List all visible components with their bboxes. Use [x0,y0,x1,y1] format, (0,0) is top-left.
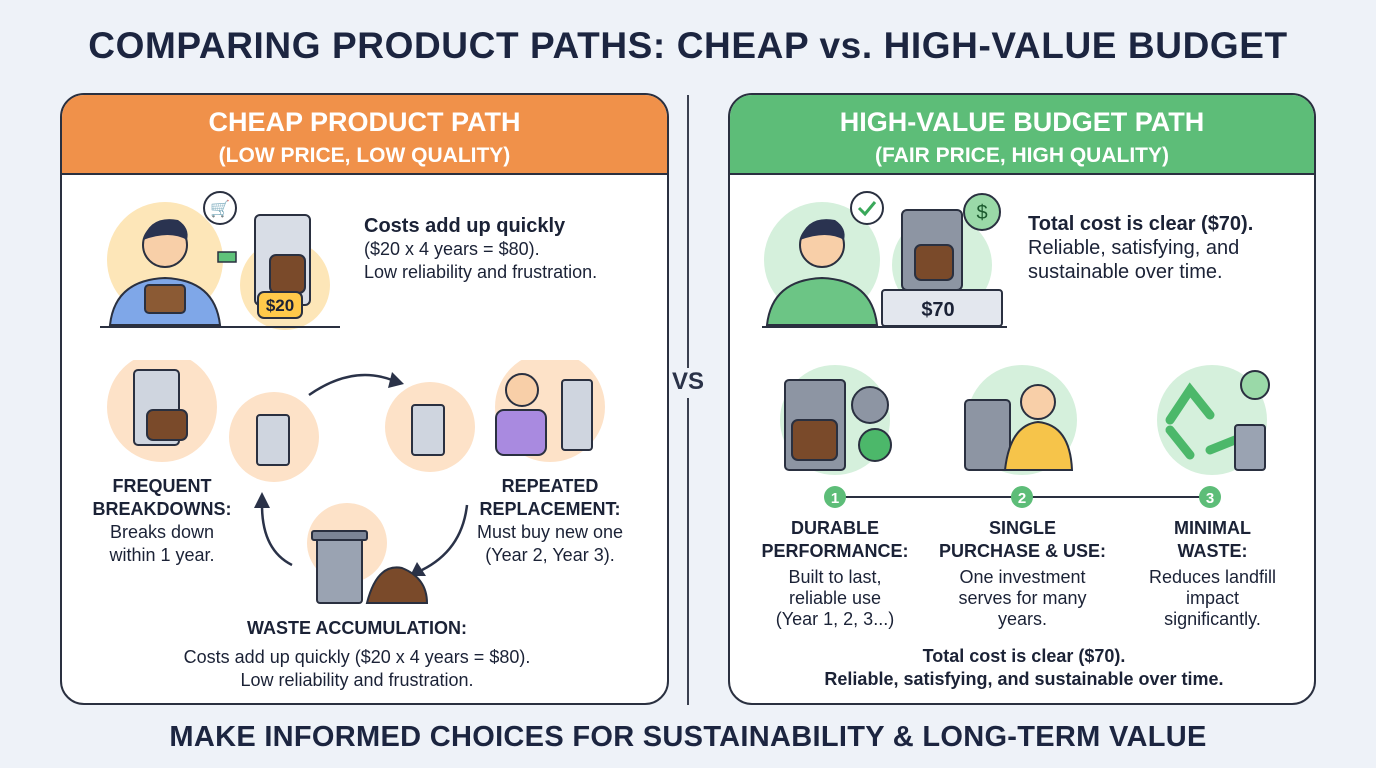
text block: costs add up: ($20 x 4 years = $80). [364,239,540,259]
panel: cheap product path [60,93,669,705]
label: single purchase: PURCHASE & USE: [939,541,1106,561]
label: minimal waste: MINIMAL [1174,518,1251,538]
label: durable performance: (Year 1, 2, 3...) [776,609,894,629]
label: frequent breakdowns: within 1 year. [109,545,215,565]
timeline: 3 [1206,490,1214,507]
header: cheap: CHEAP PRODUCT PATH [208,107,521,137]
label: durable performance: PERFORMANCE: [762,541,908,561]
label: waste accumulation: Low reliability and frustration. [240,670,474,690]
text block: costs add up: Costs add up quickly [364,215,565,237]
label: single purchase: serves for many [958,588,1087,608]
label: repeated replacement: (Year 2, Year 3). [485,545,615,565]
illustration: person with quality maker [762,191,1007,328]
text block: total cost is clear [1028,213,1253,283]
text block: total cost is clear: Total cost is clear ($70). [1028,213,1253,235]
header: high-value: HIGH-VALUE BUDGET PATH [840,107,1204,137]
label: durable performance: DURABLE [791,518,879,538]
label: frequent breakdowns: BREAKDOWNS: [92,499,232,519]
label: minimal waste: Reduces landfill [1149,567,1276,587]
divider line [687,95,689,705]
header: high-value: (FAIR PRICE, HIGH QUALITY) [875,144,1169,167]
text block: summary [824,646,1224,689]
label: waste accumulation: Costs add up quickly ($20 x 4 years = $80). [184,647,530,667]
label: durable performance [762,518,908,629]
text block: summary: Reliable, satisfying, and sustainable over time. [824,669,1224,689]
label: frequent breakdowns [92,476,232,565]
label: waste accumulation: WASTE ACCUMULATION: [247,618,467,638]
label: durable performance: reliable use [789,588,881,608]
illustration: person with quality maker: $70 [921,299,955,321]
illustration: person buying cheap maker: 🛒 [210,199,230,218]
text block: costs add up [364,215,597,282]
label: frequent breakdowns: Breaks down [110,522,214,542]
label: single purchase: One investment [959,567,1086,587]
label: minimal waste: WASTE: [1178,541,1248,561]
label: single purchase: years. [998,609,1047,629]
text block: total cost is clear: Reliable, satisfying, and [1028,237,1239,259]
label: repeated replacement [477,476,623,565]
label: single purchase: SINGLE [989,518,1056,538]
text block: costs add up: Low reliability and frustration. [364,262,597,282]
timeline: 1 [831,490,839,507]
title: COMPARING PRODUCT PATHS: CHEAP vs. HIGH-VALUE BUDGET [88,25,1288,66]
label: frequent breakdowns: FREQUENT [112,476,212,496]
label: single purchase [939,518,1106,629]
timeline: 2 [1018,490,1026,507]
label: durable performance: Built to last, [788,567,882,587]
label: minimal waste [1149,518,1276,629]
icons row [780,365,1270,475]
cycle diagram [107,360,605,576]
panel: high-value budget path [728,93,1316,705]
illustration: person buying cheap maker [100,191,340,330]
header: cheap: (LOW PRICE, LOW QUALITY) [219,144,510,167]
illustration: person buying cheap maker: $20 [266,296,294,315]
vs label: VS [672,368,704,395]
label: repeated replacement: Must buy new one [477,522,623,542]
label: minimal waste: significantly. [1164,609,1261,629]
text block: total cost is clear: sustainable over time. [1028,261,1223,283]
header: cheap [62,95,667,175]
text block: summary: Total cost is clear ($70). [923,646,1125,666]
bottom tagline: MAKE INFORMED CHOICES FOR SUSTAINABILITY & LONG-TERM VALUE [169,721,1207,753]
label: repeated replacement: REPEATED [502,476,598,496]
header: high-value [730,95,1314,175]
label: minimal waste: impact [1186,588,1239,608]
illustration: person with quality maker: $ [976,202,988,224]
trash icon: waste [307,503,428,604]
label: repeated replacement: REPLACEMENT: [479,499,620,519]
timeline [824,486,1221,508]
label: waste accumulation [184,618,530,690]
